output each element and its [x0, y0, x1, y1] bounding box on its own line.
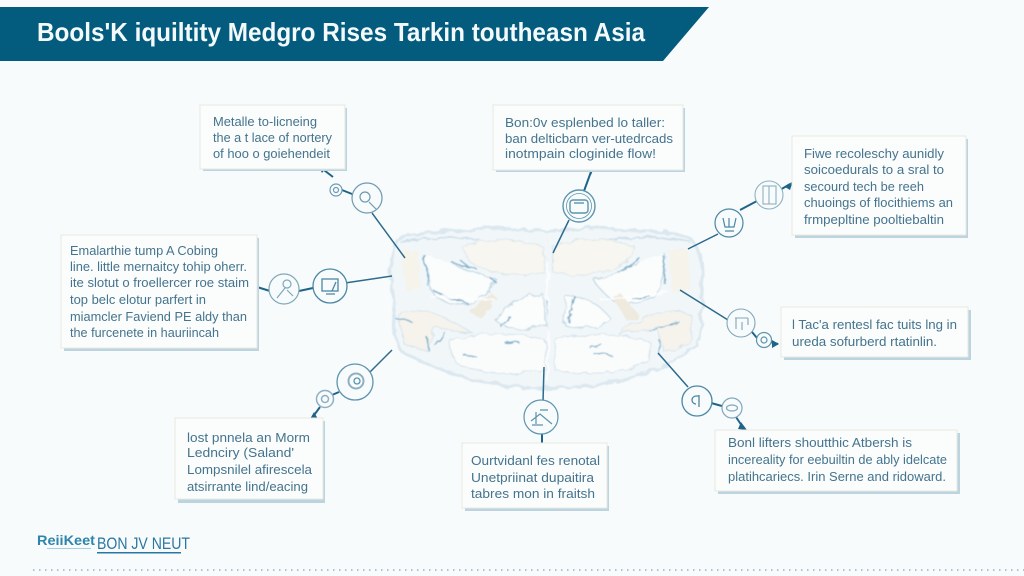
- panel: bottom center callout: tabres mon in fraitsh: [471, 487, 595, 501]
- title: Bools'K iquiltity Medgro Rises Tarkin toutheasn Asia: [37, 17, 646, 47]
- panel: bottom right callout: incereality for eebuiltin de ably idelcate: [728, 453, 947, 467]
- icon: basket node: [715, 209, 743, 237]
- panel: right top callout: frmpepltine pooltiebaltin: [804, 213, 944, 227]
- icon: device node: [563, 190, 595, 222]
- panel: right middle callout: l Tac'a rentesl fac tuits lng in: [792, 318, 957, 332]
- central illustration: bond network mass: [390, 227, 703, 388]
- panel: right middle callout: ureda sofurberd rtatinlin.: [792, 335, 937, 349]
- footer dotted rule: [33, 569, 1024, 571]
- panel: left callout: line. little mernaitcy tohip oherr.: [70, 260, 247, 274]
- icon: small target node: [756, 332, 772, 348]
- panel: top left callout: of hoo o goiehendeit: [213, 147, 331, 161]
- panel: top left callout: the a t lace of nortery: [213, 131, 333, 145]
- icon: network node: [524, 400, 558, 434]
- panel: bottom left callout: atsirrante lind/eacing: [187, 480, 308, 494]
- panel: left callout: the furcenete in hauriincah: [70, 326, 219, 340]
- icon: person node: [269, 274, 299, 304]
- panel: right top callout: chuoings of flocithiems an: [804, 196, 953, 210]
- connector lines: [345, 213, 728, 402]
- panel: right top callout: Fiwe recoleschy aunidly: [804, 147, 945, 161]
- panel: left callout: [61, 235, 259, 351]
- panel: bottom right callout: Bonl lifters shoutthic Atbersh is: [728, 436, 912, 450]
- panel: top center callout: Bon:0v esplenbed lo taller:: [505, 116, 665, 130]
- panel: bottom left callout: [175, 418, 325, 503]
- panel: bottom left callout: Lompsnilel afirescela: [187, 463, 312, 477]
- panel: bottom right callout: [715, 430, 960, 494]
- panel: left callout: miamcler Faviend PE aldy than: [70, 310, 247, 324]
- icon: small face node: [316, 390, 334, 408]
- panel: right top callout: [792, 136, 968, 238]
- panel: left callout: ite slotut o froellercer roe staim: [70, 276, 249, 290]
- panel: bottom right callout: platihcariecs. Irin Serne and ridoward.: [728, 470, 946, 484]
- panel: left callout: Emalarthie tump A Cobing: [70, 244, 218, 258]
- arrow heads: [310, 165, 793, 430]
- panel: bottom center callout: [462, 443, 609, 511]
- footer logo: [37, 532, 190, 554]
- panel: top left callout: Metalle to-licneing: [213, 115, 317, 129]
- panel: bottom left callout: lost pnnela an Morm: [187, 431, 310, 445]
- icon: magnifier node: [330, 183, 382, 213]
- icon: pill node: [722, 398, 742, 418]
- panel: top center callout: [493, 105, 685, 172]
- icon: document node: [755, 181, 783, 209]
- icon: monitor node: [313, 269, 347, 303]
- header banner: [0, 7, 709, 61]
- icon: gauge node: [682, 386, 712, 416]
- icon: chart node: [727, 309, 755, 337]
- panel: right top callout: soicoedurals to a sral to: [804, 163, 944, 177]
- panel: bottom center callout: Unetpriinat dupaitira: [471, 471, 594, 485]
- panel: top left callout: [200, 105, 347, 171]
- panel: top center callout: inotmpain cloginide flow!: [505, 147, 656, 161]
- panel: right middle callout: [781, 307, 971, 360]
- panel: bottom center callout: Ourtvidanl fes renotal: [471, 454, 600, 468]
- icon: spiral node: [337, 364, 373, 400]
- footer logo: ReiiKeet: [37, 532, 95, 548]
- callout links: [257, 167, 790, 443]
- footer logo: BON JV NEUT: [97, 534, 190, 553]
- panel: bottom left callout: Lednciry (Saland': [187, 446, 294, 460]
- panel: right top callout: secourd tech be reeh: [804, 180, 924, 194]
- panel: left callout: top belc elotur parfert in: [70, 293, 206, 307]
- panel: top center callout: ban delticbarn ver-utedrcads: [505, 132, 673, 146]
